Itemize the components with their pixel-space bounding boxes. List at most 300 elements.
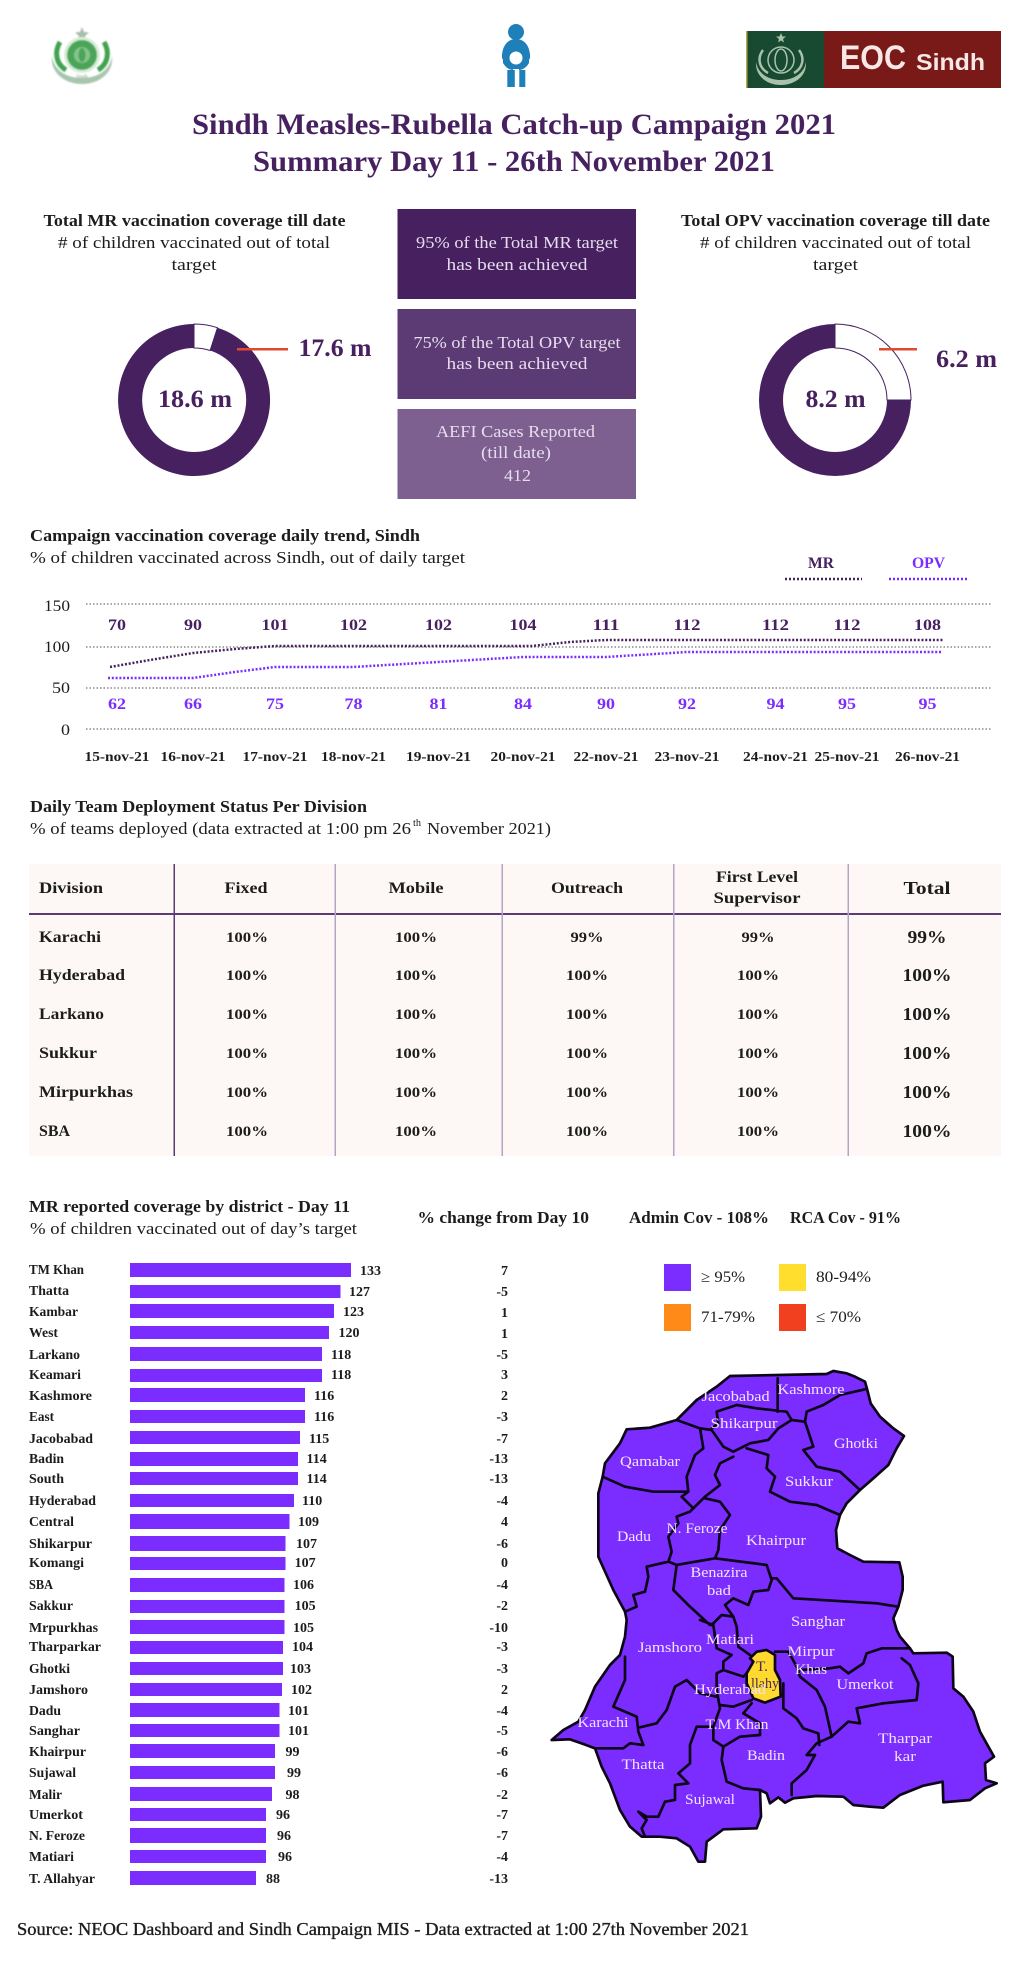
panel: team deployment <box>29 797 1001 1156</box>
table header: Division <box>39 880 103 897</box>
bar: Kambar: Kambar <box>29 1305 78 1320</box>
row: Sukkur: Sukkur <box>39 1045 97 1062</box>
trend legend: OPV <box>912 555 945 572</box>
district labels: T. <box>756 1659 768 1675</box>
bar: Kashmore <box>29 1388 508 1404</box>
bar: Komangi: 0 <box>501 1556 508 1571</box>
bar: Larkano <box>29 1347 508 1363</box>
table header: First Level <box>716 869 799 886</box>
OPV values: 95 <box>838 696 856 713</box>
bar: SBA: -4 <box>496 1578 508 1593</box>
row: Larkano: 100% <box>226 1007 268 1023</box>
row: Mirpurkhas: 100% <box>737 1085 779 1101</box>
MR values: 111 <box>592 617 620 634</box>
bar: N. Feroze <box>29 1828 508 1844</box>
bar: TM Khan: 133 <box>360 1264 381 1279</box>
MR values: 112 <box>762 617 789 634</box>
bar: Sanghar: -5 <box>496 1724 508 1739</box>
bar: Ghotki: Ghotki <box>29 1662 70 1677</box>
row: Karachi: 100% <box>226 930 268 946</box>
MR coverage heading: # of children vaccinated out of total <box>58 233 330 252</box>
OPV coverage heading <box>681 211 990 274</box>
row: Karachi: 100% <box>395 930 437 946</box>
OPV values <box>108 696 936 713</box>
bar: Jamshoro <box>29 1683 508 1698</box>
OPV donut chart: 6.2 m <box>936 346 997 373</box>
bar: Jamshoro: 102 <box>291 1683 312 1698</box>
bar: Sujawal: Sujawal <box>29 1766 76 1781</box>
row: Larkano <box>39 1004 952 1024</box>
row: Hyderabad: 100% <box>395 968 437 984</box>
OPV values: 94 <box>766 696 784 713</box>
bar: Kambar: 123 <box>343 1305 364 1320</box>
bar: Hyderabad <box>29 1494 508 1509</box>
bar: Ghotki: 103 <box>290 1662 311 1677</box>
table header <box>39 869 950 907</box>
bar: Jamshoro: 2 <box>501 1683 508 1698</box>
OPV coverage heading: target <box>813 255 858 274</box>
district labels: Matiari <box>706 1632 754 1648</box>
bar: Matiari: -4 <box>496 1850 508 1865</box>
panel: daily trend chart <box>30 526 992 765</box>
OPV values: 81 <box>430 696 448 713</box>
bar: Ghotki <box>29 1662 508 1677</box>
bar: Larkano: 118 <box>331 1348 351 1363</box>
bar: Malir: -2 <box>496 1788 508 1803</box>
callout: AEFI cases: 412 <box>504 466 531 485</box>
OPV coverage heading: # of children vaccinated out of total <box>700 233 971 252</box>
trend legend: MR <box>808 555 834 572</box>
callout: AEFI cases <box>398 409 636 499</box>
row: Hyderabad: 100% <box>902 965 952 985</box>
row: Karachi <box>39 927 946 947</box>
district shapes <box>552 1371 997 1862</box>
table header: Mobile <box>388 880 444 897</box>
bar: Shikarpur <box>29 1536 508 1552</box>
map legend: 71-79% <box>701 1309 755 1326</box>
MR coverage heading: Total MR vaccination coverage till date <box>44 211 346 230</box>
date axis: 19-nov-21 <box>406 750 471 765</box>
bar: West: 120 <box>338 1326 360 1341</box>
row: Mirpurkhas: 100% <box>566 1085 608 1101</box>
bar: Mrpurkhas: Mrpurkhas <box>29 1621 99 1636</box>
panel: district coverage headings: % of children vaccinated out of day’s target <box>30 1219 357 1238</box>
row: Hyderabad: Hyderabad <box>39 967 125 984</box>
y axis labels: 150 <box>44 598 70 615</box>
district labels: N. Feroze <box>666 1521 728 1537</box>
bar: Central: 109 <box>298 1515 319 1530</box>
bar: Umerkot <box>29 1808 508 1823</box>
OPV values: 75 <box>266 696 284 713</box>
row: SBA: 100% <box>566 1124 608 1140</box>
OPV values: 90 <box>597 696 615 713</box>
OPV values: 95 <box>918 696 936 713</box>
trend heading: % of children vaccinated across Sindh, out of daily target <box>30 548 465 567</box>
row: Sukkur: 100% <box>226 1046 268 1062</box>
row: Hyderabad: 100% <box>566 968 608 984</box>
deployment table <box>29 864 1001 1156</box>
bar: Sujawal <box>29 1766 508 1781</box>
bar: South <box>29 1472 508 1487</box>
bar: Dadu: Dadu <box>29 1704 61 1719</box>
bar: Jamshoro: Jamshoro <box>29 1683 88 1698</box>
bar: Larkano: -5 <box>496 1348 508 1363</box>
district labels: Tharpar <box>878 1731 932 1747</box>
callout: OPV target: has been achieved <box>446 354 588 373</box>
MR values: 101 <box>262 617 288 634</box>
bar: East: -3 <box>496 1410 508 1425</box>
table header: Fixed <box>224 880 268 897</box>
title: Sindh Measles-Rubella Catch-up Campaign 2021 <box>192 108 836 141</box>
MR values: 108 <box>914 617 941 634</box>
district labels: bad <box>707 1583 732 1599</box>
bar: Mrpurkhas: -10 <box>489 1621 508 1636</box>
bar: Umerkot: -7 <box>496 1808 508 1823</box>
district labels: Dadu <box>617 1529 652 1545</box>
row: Mirpurkhas: Mirpurkhas <box>39 1084 133 1101</box>
row: SBA <box>39 1121 952 1141</box>
bar: Khairpur: 99 <box>286 1745 300 1760</box>
bar: Thatta <box>29 1284 508 1300</box>
callout: AEFI cases: (till date) <box>481 443 551 462</box>
trend heading <box>30 526 465 567</box>
row: SBA: SBA <box>39 1123 70 1140</box>
bar: T. Allahyar: T. Allahyar <box>29 1872 95 1887</box>
OPV values: 84 <box>514 696 532 713</box>
bar: Badin: 114 <box>306 1452 327 1467</box>
title <box>192 108 836 178</box>
bar: Shikarpur: Shikarpur <box>29 1537 92 1552</box>
row: Sukkur: 100% <box>737 1046 779 1062</box>
OPV values: 92 <box>678 696 696 713</box>
row: SBA: 100% <box>902 1121 952 1141</box>
MR values: 112 <box>834 617 860 634</box>
source note: Source: NEOC Dashboard and Sindh Campaign MIS - Data extracted at 1:00 27th November 2021 <box>17 1919 749 1939</box>
bar: Hyderabad: Hyderabad <box>29 1494 96 1509</box>
date axis: 18-nov-21 <box>321 750 386 765</box>
map legend: ≥ 95% <box>701 1269 745 1286</box>
row: Karachi: 99% <box>908 927 946 947</box>
bar: Hyderabad: -4 <box>496 1494 508 1509</box>
bar: Sakkur <box>29 1599 508 1614</box>
panel: summary callouts <box>398 209 636 499</box>
bar: Keamari <box>29 1368 508 1383</box>
bar: Jacobabad: 115 <box>309 1432 329 1447</box>
bar: Matiari: Matiari <box>29 1850 74 1865</box>
map legend: 80-94% <box>816 1269 871 1286</box>
logo: EOC Sindh banner: Sindh <box>916 49 985 75</box>
MR coverage heading <box>44 211 346 274</box>
bar: T. Allahyar: 88 <box>266 1872 280 1887</box>
bar: Sakkur: -2 <box>496 1599 508 1614</box>
bar: Thatta: 127 <box>349 1285 370 1300</box>
district labels: Jamshoro <box>638 1640 702 1656</box>
bar: East: 116 <box>314 1410 334 1425</box>
bar: TM Khan <box>29 1263 508 1279</box>
bar: Dadu: -4 <box>496 1704 508 1719</box>
row: Hyderabad: 100% <box>226 968 268 984</box>
map legend <box>664 1264 871 1331</box>
bar: Central: 4 <box>501 1515 508 1530</box>
OPV donut chart: 8.2 m <box>806 386 866 413</box>
bar: Matiari: 96 <box>278 1850 292 1865</box>
panel: total OPV coverage <box>681 211 997 476</box>
MR values: 104 <box>510 617 536 634</box>
bar: SBA: SBA <box>29 1578 54 1593</box>
date axis: 16-nov-21 <box>160 750 226 765</box>
bar: Keamari: 3 <box>501 1368 508 1383</box>
date axis <box>84 750 960 765</box>
bar: N. Feroze: N. Feroze <box>29 1829 85 1844</box>
panel: district coverage headings: MR reported coverage by district - Day 11 <box>29 1197 350 1216</box>
row: Mirpurkhas: 100% <box>395 1085 437 1101</box>
row: Karachi: 99% <box>742 930 774 946</box>
bar: Dadu: 101 <box>288 1704 309 1719</box>
bar: Khairpur: -6 <box>496 1745 508 1760</box>
bar: Badin <box>29 1452 508 1467</box>
date axis: 17-nov-21 <box>242 750 308 765</box>
district labels: Hyderabad <box>694 1682 767 1698</box>
OPV values: 66 <box>184 696 202 713</box>
bar: Badin: -13 <box>489 1452 508 1467</box>
district labels: Thatta <box>622 1757 665 1773</box>
bar: T. Allahyar: -13 <box>489 1872 508 1887</box>
bar: T. Allahyar <box>29 1871 508 1887</box>
district labels: Badin <box>747 1748 786 1764</box>
bar: Kambar <box>29 1304 508 1321</box>
bar: Sakkur: Sakkur <box>29 1599 73 1614</box>
bar: Tharparkar: Tharparkar <box>29 1640 101 1655</box>
bar: Larkano: Larkano <box>29 1348 80 1363</box>
bar chart: district coverage <box>29 1263 508 1887</box>
date axis: 15-nov-21 <box>84 750 150 765</box>
row: Hyderabad: 100% <box>737 968 779 984</box>
y axis labels: 50 <box>52 680 70 697</box>
bar: N. Feroze: 96 <box>277 1829 291 1844</box>
district labels: kar <box>894 1749 916 1765</box>
deployment heading <box>30 797 551 838</box>
bar: Jacobabad: Jacobabad <box>29 1432 93 1447</box>
map: Sindh districts <box>552 1371 997 1862</box>
row: Larkano: 100% <box>737 1007 779 1023</box>
bar: Shikarpur: -6 <box>496 1537 508 1552</box>
bar: Mrpurkhas: 105 <box>293 1621 314 1636</box>
bar: Kashmore: 2 <box>501 1389 508 1404</box>
logo: EOC Sindh banner <box>746 31 1001 88</box>
row: Sukkur: 100% <box>566 1046 608 1062</box>
logo: Sindh government emblem <box>52 27 112 84</box>
bar: West: 1 <box>501 1327 508 1342</box>
bar: South: South <box>29 1472 64 1487</box>
MR coverage heading: target <box>172 255 217 274</box>
deployment heading: November 2021) <box>427 819 551 838</box>
bar: Umerkot: Umerkot <box>29 1808 83 1823</box>
row: Sukkur: 100% <box>902 1043 952 1063</box>
row: Sukkur: 100% <box>395 1046 437 1062</box>
row: Larkano: Larkano <box>39 1006 104 1023</box>
bar: Tharparkar <box>29 1640 508 1655</box>
row: SBA: 100% <box>395 1124 437 1140</box>
bar: Malir <box>29 1787 508 1803</box>
y axis labels: 100 <box>44 639 70 656</box>
row: Mirpurkhas: 100% <box>226 1085 268 1101</box>
bar: Sujawal: -6 <box>496 1766 508 1781</box>
OPV trend line <box>108 652 941 678</box>
MR values: 102 <box>340 617 367 634</box>
row: Sukkur <box>39 1043 952 1063</box>
bar: Malir: 98 <box>286 1788 300 1803</box>
row: Hyderabad <box>39 965 952 985</box>
district labels: Sukkur <box>785 1474 833 1490</box>
district labels: Kashmore <box>778 1382 845 1398</box>
bar: Hyderabad: 110 <box>302 1494 322 1509</box>
callout: MR target: has been achieved <box>446 255 588 274</box>
panel: district coverage headings: Admin Cov - 108% <box>629 1208 769 1227</box>
district labels: Jacobabad <box>702 1389 770 1405</box>
bar: Keamari: Keamari <box>29 1368 81 1383</box>
district labels: Mirpur <box>788 1644 834 1660</box>
OPV coverage heading: Total OPV vaccination coverage till date <box>681 211 990 230</box>
district labels: Karachi <box>578 1715 628 1731</box>
bar: Komangi <box>29 1556 508 1571</box>
OPV values: 78 <box>344 696 362 713</box>
bar: Kambar: 1 <box>501 1306 508 1321</box>
row: SBA: 100% <box>226 1124 268 1140</box>
panel: district coverage headings <box>29 1197 901 1238</box>
district labels: Benazira <box>690 1565 748 1581</box>
bar: Sanghar: 101 <box>288 1724 309 1739</box>
bar: Thatta: Thatta <box>29 1284 69 1299</box>
district labels: T.M Khan <box>706 1717 769 1733</box>
row: Mirpurkhas: 100% <box>902 1082 952 1102</box>
bar: Umerkot: 96 <box>276 1808 290 1823</box>
bar: Jacobabad: -7 <box>496 1432 508 1447</box>
row: Larkano: 100% <box>902 1004 952 1024</box>
bar: East <box>29 1410 508 1425</box>
MR values: 112 <box>674 617 700 634</box>
row: Larkano: 100% <box>395 1007 437 1023</box>
row: Karachi: Karachi <box>39 929 102 946</box>
bar: Mrpurkhas <box>29 1620 508 1636</box>
bar: Ghotki: -3 <box>496 1662 508 1677</box>
callout: OPV target <box>398 309 636 399</box>
row: SBA: 100% <box>737 1124 779 1140</box>
bar: TM Khan: TM Khan <box>29 1263 84 1278</box>
district labels: Sujawal <box>685 1792 735 1808</box>
trend heading: Campaign vaccination coverage daily trend, Sindh <box>30 526 421 545</box>
bar: Jacobabad <box>29 1431 508 1447</box>
table header: Outreach <box>551 880 623 897</box>
date axis: 26-nov-21 <box>895 750 960 765</box>
bar: Malir: Malir <box>29 1788 62 1803</box>
logo: blue parent and child icon <box>500 24 532 87</box>
bar: Shikarpur: 107 <box>296 1537 317 1552</box>
date axis: 24-nov-21 <box>743 750 808 765</box>
date axis: 23-nov-21 <box>654 750 720 765</box>
row: Mirpurkhas <box>39 1082 952 1102</box>
bar: Central: Central <box>29 1515 74 1530</box>
bar: Tharparkar: 104 <box>292 1640 313 1655</box>
district labels: llahy <box>751 1676 779 1692</box>
bar: Central <box>29 1514 508 1530</box>
district labels: Qamabar <box>620 1454 680 1470</box>
bar: Komangi: 107 <box>295 1556 316 1571</box>
callout: MR target <box>398 209 636 299</box>
callout: MR target: 95% of the Total MR target <box>416 233 618 252</box>
row: Larkano: 100% <box>566 1007 608 1023</box>
bar: Sujawal: 99 <box>287 1766 301 1781</box>
bar: Sanghar: Sanghar <box>29 1724 80 1739</box>
MR trend line <box>110 640 943 667</box>
bar: SBA: 106 <box>293 1578 314 1593</box>
district labels: Khas <box>795 1662 827 1678</box>
bar: Kashmore: 116 <box>314 1389 334 1404</box>
panel: district coverage headings: RCA Cov - 91% <box>790 1208 901 1227</box>
bar: Dadu <box>29 1703 508 1719</box>
district labels: Shikarpur <box>710 1416 778 1432</box>
bar: Keamari: 118 <box>331 1368 351 1383</box>
bar: Komangi: Komangi <box>29 1556 84 1571</box>
MR values: 102 <box>425 617 452 634</box>
bar: Tharparkar: -3 <box>496 1640 508 1655</box>
district: T. Allahyar <box>747 1650 781 1703</box>
deployment heading: Daily Team Deployment Status Per Division <box>30 797 368 816</box>
bar: Khairpur <box>29 1744 508 1760</box>
district labels: Khairpur <box>746 1533 806 1549</box>
map legend: ≤ 70% <box>816 1309 861 1326</box>
table header: Total <box>904 878 950 898</box>
OPV values: 62 <box>108 696 126 713</box>
district labels <box>578 1382 932 1808</box>
MR donut chart: 18.6 m <box>158 386 232 413</box>
OPV donut chart <box>759 324 997 476</box>
district labels: Ghotki <box>834 1436 878 1452</box>
bar: Kashmore: Kashmore <box>29 1389 92 1404</box>
bar: South: 114 <box>306 1472 327 1487</box>
bar: East: East <box>29 1410 54 1425</box>
deployment heading: th <box>413 818 421 829</box>
district labels: Umerkot <box>836 1677 894 1693</box>
row: Karachi: 99% <box>570 930 604 946</box>
table header: Supervisor <box>714 890 800 907</box>
MR values: 70 <box>108 617 126 634</box>
bar: West <box>29 1326 508 1342</box>
bar: SBA <box>29 1578 508 1593</box>
trend legend <box>785 555 967 579</box>
y axis labels <box>44 598 70 739</box>
MR donut chart <box>118 324 372 476</box>
bar: Matiari <box>29 1850 508 1865</box>
MR values: 90 <box>184 617 202 634</box>
logo: EOC Sindh banner: EOC <box>840 39 906 77</box>
date axis: 25-nov-21 <box>814 750 880 765</box>
callout: AEFI cases: AEFI Cases Reported <box>436 422 596 441</box>
bar: Badin: Badin <box>29 1452 64 1467</box>
MR donut chart: 17.6 m <box>298 335 372 362</box>
panel: total MR coverage <box>44 211 372 476</box>
bar: Thatta: -5 <box>496 1285 508 1300</box>
bar: Sakkur: 105 <box>295 1599 316 1614</box>
deployment heading: % of teams deployed (data extracted at 1:00 pm 26 <box>30 819 411 838</box>
bar: Sanghar <box>29 1724 508 1739</box>
panel: district coverage headings: % change from Day 10 <box>418 1208 589 1227</box>
title: Summary Day 11 - 26th November 2021 <box>253 145 775 178</box>
bar: West: West <box>29 1326 58 1341</box>
bar: South: -13 <box>489 1472 508 1487</box>
logo: Sindh government emblem: Sindh <box>76 75 88 80</box>
y axis labels: 0 <box>61 722 70 739</box>
date axis: 22-nov-21 <box>574 750 638 765</box>
